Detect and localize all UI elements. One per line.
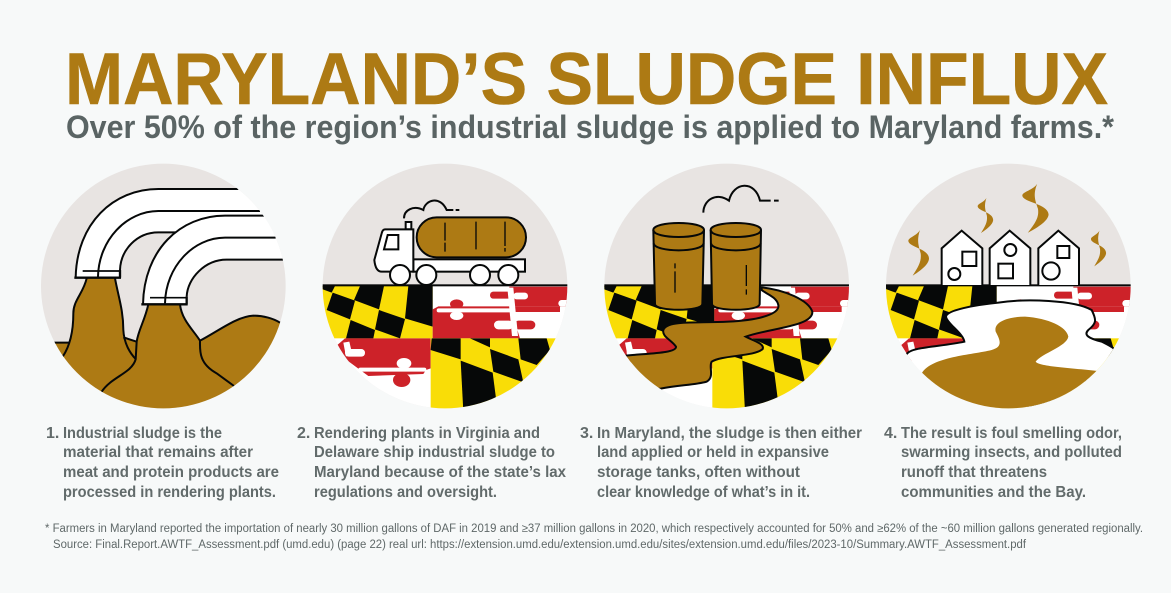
Maryland flag ground bbox=[886, 284, 1131, 408]
step 1 text bbox=[46, 425, 279, 501]
polluted runoff bbox=[906, 299, 1114, 408]
step 2 text: Delaware ship industrial sludge to bbox=[314, 444, 555, 461]
step 4 text bbox=[884, 425, 1122, 501]
pipe: front bbox=[141, 216, 297, 304]
icon: storage tank left bbox=[653, 223, 704, 310]
panel 3: storage tanks and sludge river bbox=[592, 164, 858, 413]
icons: houses bbox=[942, 231, 1079, 285]
step 1 text: processed in rendering plants. bbox=[63, 484, 276, 501]
step 4 text: swarming insects, and polluted bbox=[901, 444, 1122, 461]
panel 1: rendering plant illustration bbox=[41, 164, 286, 408]
Maryland flag ground bbox=[604, 284, 849, 408]
footnote: * Farmers in Maryland reported the importation of nearly 30 million gallons of DAF in 2019 and ≥37 million gallons in 2020, which respectively accounted for 50% and ≥62% of the ~60 million gallons generated regionally. bbox=[45, 523, 1143, 535]
step 3 text: land applied or held in expansive bbox=[597, 444, 829, 461]
step 3 text: In Maryland, the sludge is then either bbox=[597, 425, 862, 442]
step 3 text: clear knowledge of what’s in it. bbox=[597, 484, 810, 501]
icon: tanker truck bbox=[374, 201, 526, 285]
step 3 text: 3. bbox=[580, 425, 593, 442]
subtitle: Over 50% of the region’s industrial sludge is applied to Maryland farms.* bbox=[66, 109, 1115, 145]
step 4 text: The result is foul smelling odor, bbox=[901, 425, 1122, 442]
sludge river bbox=[612, 287, 812, 390]
sludge pool bbox=[922, 316, 1096, 408]
infographic canvas bbox=[41, 52, 1142, 550]
sludge mounds bbox=[54, 278, 280, 408]
icon: storage tank right bbox=[711, 223, 761, 310]
step 2 text: regulations and oversight. bbox=[314, 484, 497, 501]
footnote bbox=[45, 523, 1143, 551]
step 4 text: 4. bbox=[884, 425, 897, 442]
step 3 text bbox=[580, 425, 862, 501]
footnote: Source: Final.Report.AWTF_Assessment.pdf (umd.edu) (page 22) real url: https://extension.umd.edu/extension.umd.edu/sites/extension.umd.edu/files/2023-10/Summary.AWTF_Assessment.pdf bbox=[53, 539, 1027, 551]
step 1 text: 1. bbox=[46, 425, 59, 442]
icons: odor wisps bbox=[908, 184, 1106, 276]
pipe: back bbox=[74, 188, 262, 279]
step 2 text: Maryland because of the state’s lax bbox=[314, 464, 566, 481]
step 1 text: meat and protein products are bbox=[63, 464, 279, 481]
step 2 text bbox=[297, 425, 566, 501]
step 4 text: runoff that threatens bbox=[901, 464, 1047, 481]
step 3 text: storage tanks, often without bbox=[597, 464, 801, 481]
panel 4: odor over houses bbox=[886, 164, 1131, 408]
Maryland flag ground bbox=[322, 284, 568, 408]
title: MARYLAND’S SLUDGE INFLUX bbox=[65, 39, 1108, 120]
step 2 text: Rendering plants in Virginia and bbox=[314, 425, 540, 442]
icon: smoke bbox=[703, 186, 779, 213]
step 1 text: Industrial sludge is the bbox=[63, 425, 222, 442]
white ground below river bbox=[680, 386, 688, 387]
step 1 text: material that remains after bbox=[63, 444, 253, 461]
panel 2: truck over Maryland flag bbox=[310, 164, 577, 413]
step 4 text: communities and the Bay. bbox=[901, 484, 1086, 501]
step 2 text: 2. bbox=[297, 425, 310, 442]
